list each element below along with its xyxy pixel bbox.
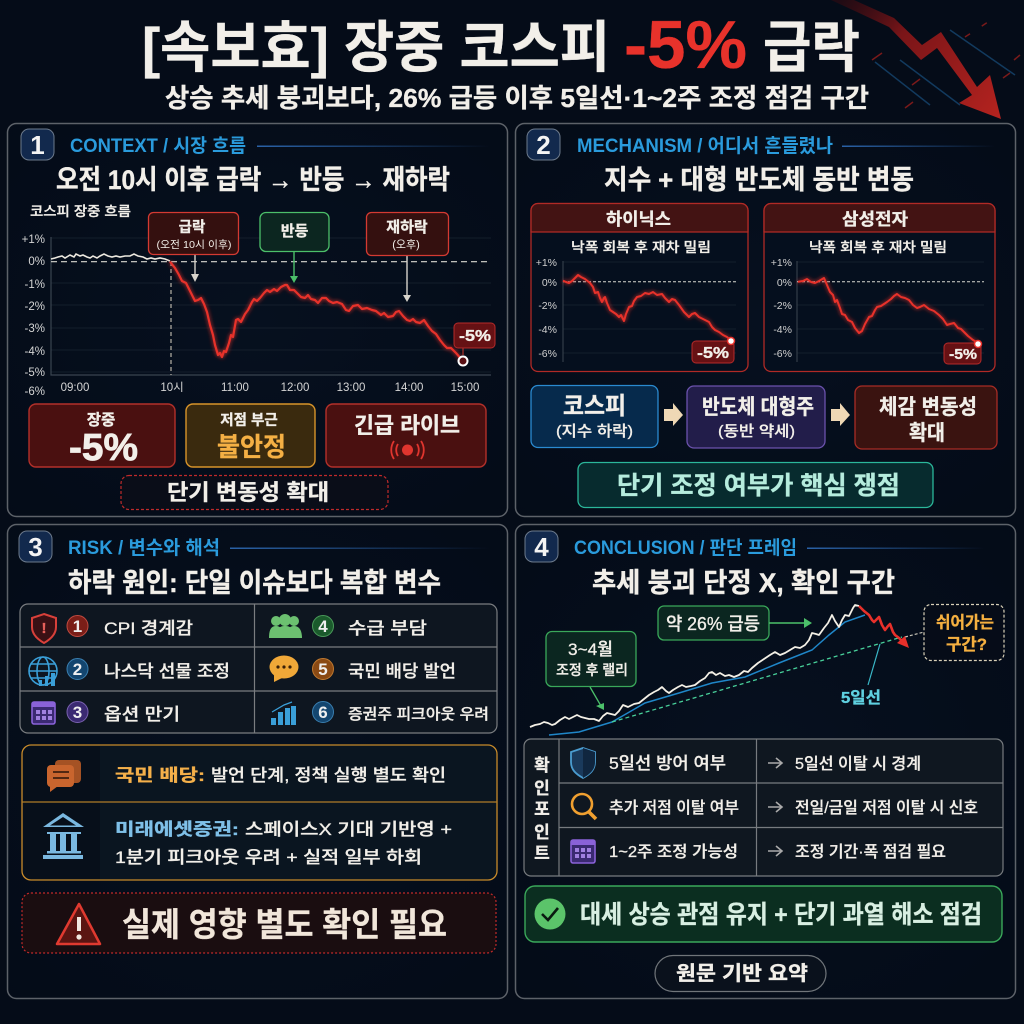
factor 2 [29, 657, 230, 686]
panel 1: context [8, 124, 508, 516]
callout: 급락: 급락 [179, 219, 205, 236]
icon: bank [43, 813, 84, 859]
conclusion bar: 단기 조정 [578, 462, 933, 508]
callout: 3~4월: 조정 후 랠리 [556, 662, 628, 678]
callout: short-term volatility [121, 476, 388, 510]
mini chart: 삼성전자: 0% [777, 277, 792, 289]
line chart: kospi intraday: -5% [25, 367, 45, 379]
row: 추가 저점 [572, 794, 978, 819]
line chart: kospi intraday: 0% [28, 256, 45, 268]
badge 1: 1 [30, 130, 45, 160]
title: 급락 [763, 16, 860, 79]
factor grid [20, 604, 497, 733]
callout: 재하락 [366, 212, 448, 302]
factor 4: 수급 부담 [348, 619, 427, 638]
mini chart: 삼성전자: -6% [773, 348, 792, 360]
title: [속보효] 장중 코스피 [142, 16, 610, 79]
warning bar: 실제 영향 별도 확인 필요 [122, 906, 447, 943]
callout: 재하락: (오후) [392, 238, 420, 251]
mini chart: 삼성전자: 삼성전자 [842, 210, 908, 229]
text: 국민 배당: 발언 단계, 정책 실행 별도 확인 [211, 766, 446, 785]
label: 5일선: 5일선 [841, 689, 881, 707]
mini chart: 하이닉스: +1% [536, 257, 557, 269]
line chart: kospi intraday: 14:00 [395, 382, 423, 394]
row: 5일선 방어: 5일선 방어 여부 [609, 754, 726, 773]
text: 국민 배당 [115, 766, 446, 785]
mini chart: 삼성전자: +1% [771, 257, 792, 269]
line chart: kospi intraday: 10시 [160, 381, 184, 394]
line chart: kospi intraday: -6% [25, 386, 45, 398]
callout: 쉬어가는 구간: 구간? [946, 635, 987, 654]
mini chart: 삼성전자 [764, 204, 995, 372]
checklist table [524, 739, 1003, 876]
line chart: kospi intraday: 13:00 [337, 382, 365, 394]
arrow [664, 403, 683, 426]
mini chart: 하이닉스 [531, 204, 748, 372]
tag: -5% [692, 341, 734, 363]
badge 3: 3 [28, 532, 43, 562]
mini chart: 삼성전자: 낙폭 회복 후 재차 밀림 [809, 240, 947, 255]
section label: RISK / 변수와 해석 [68, 537, 220, 559]
stat: 불안정 [186, 404, 315, 467]
mini chart: 하이닉스: 낙폭 회복 후 재차 밀림 [571, 240, 711, 255]
factor 2: 나스닥 선물 조정 [104, 662, 230, 681]
conclusion bar: 대세 상승 관점 유지 + 단기 과열 해소 점검 [580, 901, 982, 929]
row: 1~2주 조정: 1~2주 조정 가능성 [609, 843, 738, 861]
factor 5 [270, 656, 456, 682]
trend chart [530, 605, 924, 735]
line chart: kospi intraday: 15:00 [451, 382, 479, 394]
line chart: kospi intraday: 11:00 [221, 382, 249, 394]
factor 1: 1 [73, 617, 82, 636]
heading: 하락 원인: 단일 이슈보다 복합 변수 [68, 568, 441, 598]
vertical label: 트 [534, 844, 550, 863]
vertical label: 인 [534, 823, 550, 842]
callout: 반등: 반등 [281, 223, 308, 240]
badge 1 [21, 129, 54, 160]
pill: source summary: 원문 기반 요약 [676, 962, 808, 985]
heading: 추세 붕괴 단정 X, 확인 구간 [592, 568, 895, 598]
callout: 급락: (오전 10시 이후) [156, 239, 232, 251]
vertical label: 확 [534, 756, 550, 775]
mini chart: 삼성전자: -4% [773, 324, 792, 336]
section label: MECHANISM / 어디서 흔들렸나 [577, 135, 833, 157]
badge 2: 2 [536, 130, 551, 160]
badge 3 [19, 531, 52, 562]
tag: -5%: -5% [459, 328, 491, 345]
stat: 불안정: 불안정 [217, 432, 286, 462]
line chart: kospi intraday [22, 204, 491, 398]
row: 추가 저점: 전일/금일 저점 이탈 시 신호 [795, 799, 978, 817]
factor 1: ! [42, 620, 46, 637]
line chart: kospi intraday: -2% [25, 301, 45, 313]
end marker [458, 356, 468, 366]
row: 1~2주 조정: 조정 기간·폭 점검 필요 [795, 843, 946, 861]
panel 2: mechanism [516, 124, 1016, 516]
flow: 반도체 대형주: 반도체 대형주 [702, 396, 814, 419]
factor 5: 국민 배당 발언 [348, 662, 456, 681]
background streaks [872, 22, 1020, 108]
mini chart: 하이닉스: -2% [538, 300, 557, 312]
callout: 급락 [148, 212, 238, 282]
section label: CONCLUSION / 판단 프레임 [574, 537, 797, 559]
title [142, 7, 860, 83]
arrow [831, 403, 850, 426]
section label: CONTEXT / 시장 흐름 [70, 135, 246, 157]
background red down arrow [831, 0, 1001, 119]
callout: 재하락: 재하락 [386, 219, 428, 236]
factor 6: 증권주 피크아웃 우려 [348, 706, 489, 723]
factor 1 [32, 614, 193, 643]
text: 미래에셋증권: 스페이스X 기대 기반영 + [245, 820, 452, 839]
line chart: kospi intraday: -4% [25, 346, 45, 358]
line chart: kospi intraday: 09:00 [61, 382, 89, 394]
pill: source summary [655, 956, 826, 992]
conclusion bar: 단기 조정: 단기 조정 여부가 핵심 쟁점 [617, 472, 900, 500]
flow: 반도체 대형주: (동반 약세) [718, 423, 795, 440]
flow: 코스피: (지수 하락) [556, 423, 633, 440]
callout: 약 26% 급등: 약 26% 급등 [666, 614, 760, 634]
badge 4: 4 [534, 532, 549, 562]
factor 6: 6 [318, 703, 328, 722]
callout: 3~4월: 3~4월 [568, 640, 613, 659]
badge 4 [525, 531, 558, 562]
mini chart: 삼성전자: -2% [773, 300, 792, 312]
factor 4 [269, 614, 427, 638]
title: -5% [624, 7, 747, 83]
label: 5일선 [841, 644, 881, 707]
row: 5일선 방어: 5일선 이탈 시 경계 [795, 755, 921, 773]
panel 3: risk [8, 524, 508, 998]
vertical label: 포 [534, 800, 550, 819]
callout: short-term volatility: 단기 변동성 확대 [167, 480, 329, 505]
heading: 지수 + 대형 반도체 동반 변동 [604, 165, 914, 195]
warning bar [22, 893, 496, 953]
line chart: kospi intraday: +1% [22, 234, 45, 246]
icon: check [534, 898, 566, 930]
text: 미래에셋증권 [115, 820, 452, 867]
flow: 체감 변동성 확대: 확대 [909, 422, 945, 445]
callout: 쉬어가는 구간 [924, 604, 1004, 660]
factor 3: 3 [73, 703, 82, 722]
factor 5: 5 [318, 660, 328, 679]
panel 4: conclusion [516, 524, 1016, 998]
tag: -5% [944, 343, 981, 364]
tag: -5%: -5% [697, 345, 729, 362]
row: 추가 저점: 추가 저점 이탈 여부 [609, 799, 739, 817]
text: 국민 배당: 국민 배당: [115, 766, 205, 785]
tag: -5% [454, 323, 495, 348]
vertical label: 인 [534, 779, 550, 798]
flow: 코스피 [531, 386, 658, 448]
heading: 오전 10시 이후 급락 → 반등 → 재하락 [56, 165, 450, 195]
row: 5일선 방어 [571, 748, 921, 778]
conclusion bar [525, 886, 1002, 942]
tag: -5%: -5% [949, 346, 977, 363]
factor 1: CPI 경계감 [104, 619, 193, 638]
flow: 반도체 대형주 [687, 386, 825, 448]
mini chart: 하이닉스: -4% [538, 324, 557, 336]
subtitle: 상승 추세 붕괴보다, 26% 급등 이후 5일선·1~2주 조정 점검 구간 [165, 83, 869, 113]
factor 3: 옵션 만기 [104, 705, 180, 724]
stat: 긴급 라이브 [326, 404, 486, 467]
flow: 코스피: 코스피 [563, 393, 626, 420]
factor 3 [32, 702, 180, 724]
text: 미래에셋증권: 1분기 피크아웃 우려 + 실적 일부 하회 [115, 848, 422, 867]
line chart: kospi intraday: -3% [25, 323, 45, 335]
callout: 3~4월 [546, 632, 636, 710]
factor 4: 4 [318, 617, 328, 636]
detail box [22, 745, 497, 880]
line chart: kospi intraday: 12:00 [281, 382, 309, 394]
mini chart: 하이닉스: 0% [542, 277, 557, 289]
stat: 불안정: 저점 부근 [220, 412, 278, 429]
stat: 긴급 라이브: 긴급 라이브 [354, 413, 460, 438]
stat: 장중 -5%: -5% [69, 427, 138, 469]
stat: 장중 -5% [29, 404, 175, 469]
text: 미래에셋증권: 미래에셋증권: [115, 820, 239, 839]
flow: 체감 변동성 확대: 체감 변동성 [879, 396, 977, 419]
callout: 약 26% 급등 [658, 606, 812, 640]
flow: 체감 변동성 확대 [855, 386, 997, 449]
icon: chat bubbles [47, 760, 81, 792]
badge 2 [527, 129, 560, 160]
callout: 반등 [260, 212, 329, 283]
line chart: kospi intraday: 코스피 장중 흐름 [30, 204, 131, 219]
mini chart: 하이닉스: 하이닉스 [606, 210, 671, 229]
icon: broadcast [391, 441, 424, 459]
line chart: kospi intraday: -1% [25, 279, 45, 291]
icon: warning [57, 904, 100, 944]
mini chart: 하이닉스: -6% [538, 348, 557, 360]
callout: 쉬어가는 구간: 쉬어가는 [936, 613, 994, 632]
factor 2: 2 [73, 660, 82, 679]
factor 6 [271, 702, 489, 725]
stat: 장중 -5%: 장중 [87, 411, 115, 429]
vertical label [534, 756, 550, 863]
row: 1~2주 조정 [571, 840, 946, 863]
